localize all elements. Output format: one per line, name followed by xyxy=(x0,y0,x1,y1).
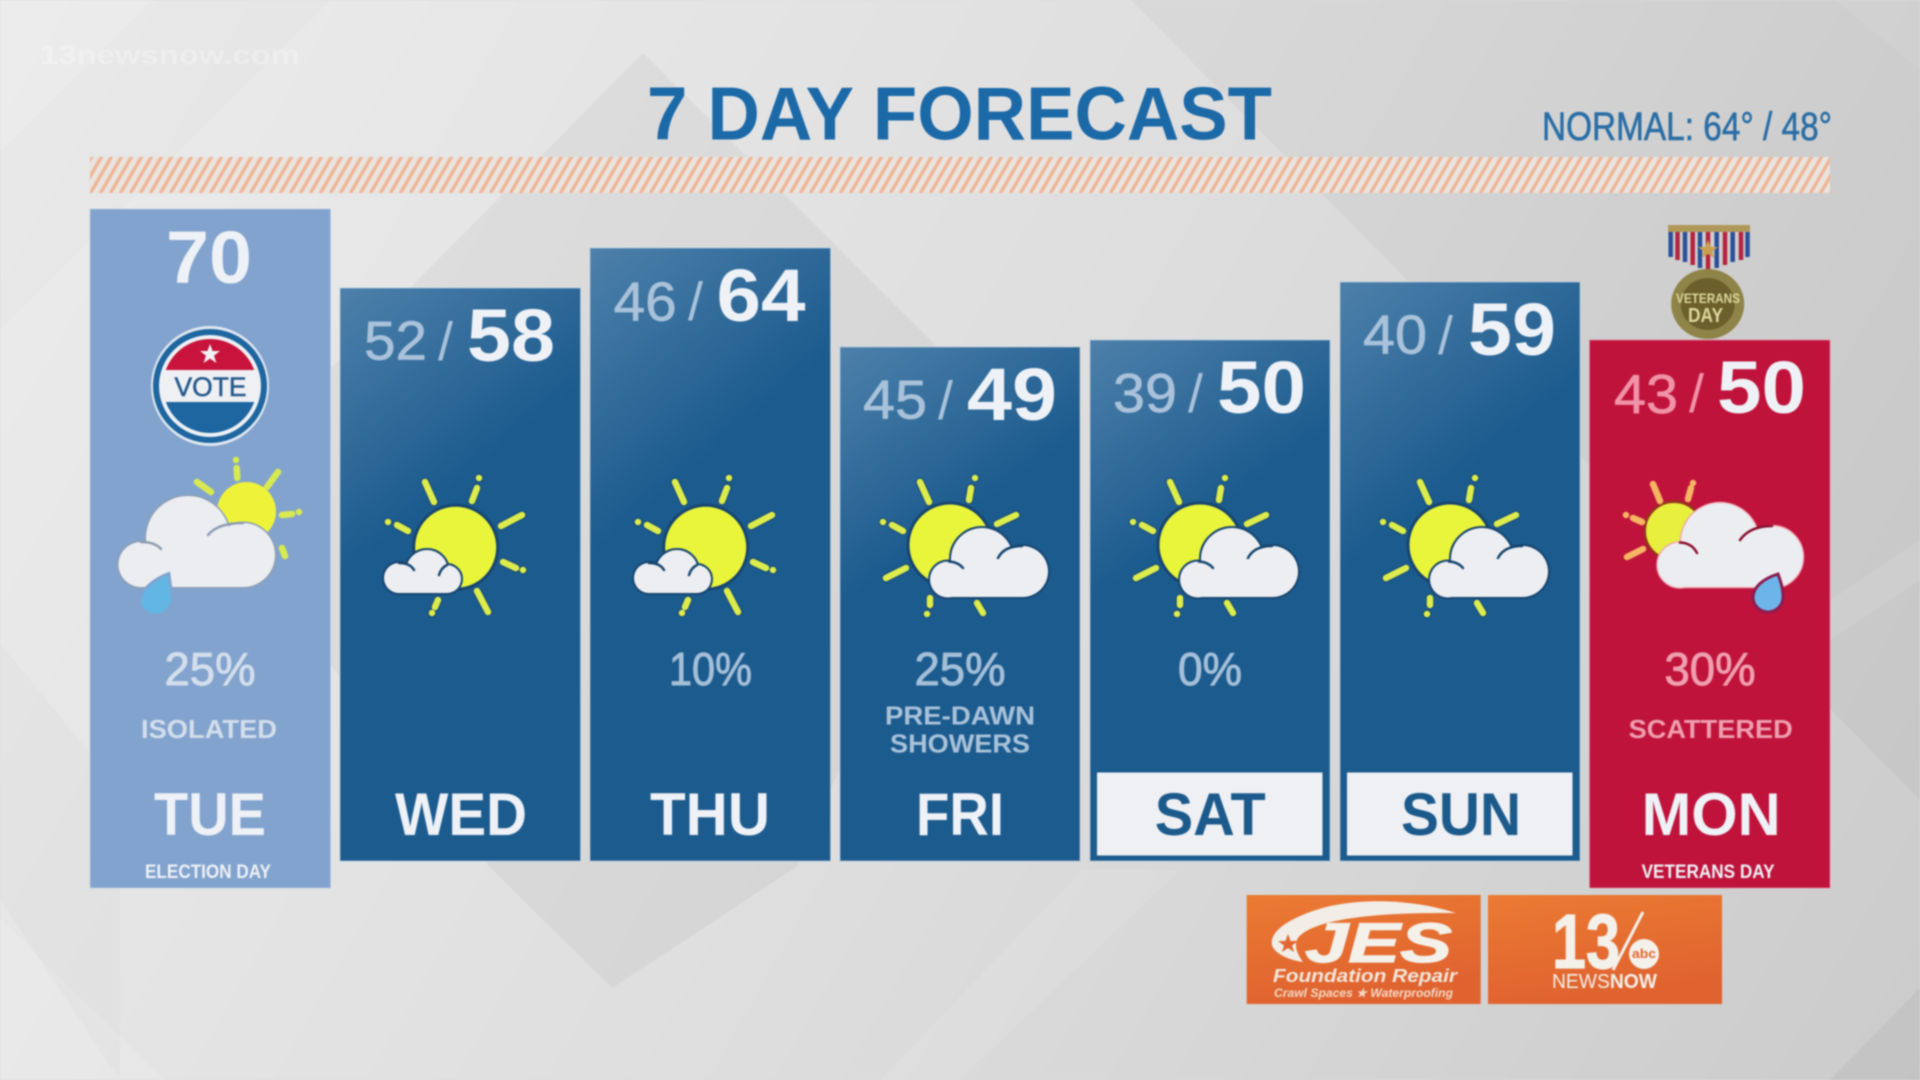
icon: cloud with sun and rain xyxy=(118,460,299,614)
mon background xyxy=(1590,340,1830,888)
logo number: 13 xyxy=(1552,899,1620,985)
panel: tuesday xyxy=(90,209,330,888)
mon temperatures: 50 xyxy=(1717,346,1806,429)
fri note: PRE-DAWN xyxy=(885,700,1035,730)
icon: veterans day medal xyxy=(1668,225,1750,339)
sat temperatures: / xyxy=(1188,364,1203,424)
fri temperatures: / xyxy=(938,371,953,431)
normal temperatures: NORMAL: 64° / 48° xyxy=(1542,105,1832,149)
wed day label: WED xyxy=(395,781,527,848)
tue note: ISOLATED xyxy=(141,714,277,744)
panel: wednesday xyxy=(340,288,580,861)
tue holiday label: ELECTION DAY xyxy=(145,862,271,883)
fri note: SHOWERS xyxy=(890,728,1030,758)
thu temperatures: 64 xyxy=(716,254,806,337)
icon: veterans day medal: DAY xyxy=(1688,305,1724,327)
thu temperatures: 46 xyxy=(614,270,677,332)
jes star xyxy=(1278,934,1298,952)
fri day label: FRI xyxy=(916,781,1004,848)
mon note: SCATTERED xyxy=(1629,714,1793,744)
striped orange band xyxy=(90,157,1830,193)
icon: sun with large cloud xyxy=(1133,478,1298,614)
logo slash xyxy=(1613,912,1643,970)
panel: friday xyxy=(840,347,1080,861)
sun temperatures xyxy=(1363,288,1556,371)
fri background xyxy=(840,347,1080,861)
wed background xyxy=(340,288,580,861)
title: 7 DAY FORECAST xyxy=(647,72,1272,156)
icon: vote badge xyxy=(151,326,269,446)
thu temperatures xyxy=(614,254,806,337)
sat day label: SAT xyxy=(1155,781,1266,848)
icon: sun with small cloud xyxy=(384,478,523,613)
sat temperatures: 50 xyxy=(1217,346,1306,429)
thu temperatures: / xyxy=(688,272,703,332)
wed temperatures xyxy=(364,294,555,377)
thu day label: THU xyxy=(650,781,770,848)
wed temperatures: 52 xyxy=(364,310,427,372)
icon: veterans day medal: VETERANS xyxy=(1676,290,1740,306)
mon day label: MON xyxy=(1642,781,1781,848)
icon: sun with large cloud xyxy=(883,478,1048,614)
logo wordmark: NEWSNOW xyxy=(1552,971,1657,993)
sat temperatures xyxy=(1113,346,1306,429)
tue rain chance: 25% xyxy=(164,643,256,695)
fri rain chance: 25% xyxy=(914,643,1006,695)
wed temperatures: / xyxy=(438,312,453,372)
sat temperatures: 39 xyxy=(1113,362,1177,424)
sun temperatures: / xyxy=(1438,306,1453,366)
tue high temperature: 70 xyxy=(166,216,252,299)
fri temperatures: 45 xyxy=(863,368,927,430)
jes wordmark: JES xyxy=(1305,911,1452,974)
tue background xyxy=(90,209,330,888)
jes swoosh xyxy=(1272,901,1456,962)
abc circle: abc xyxy=(1632,946,1656,961)
panel: monday xyxy=(1590,340,1830,888)
fri temperatures xyxy=(863,353,1057,436)
sun day box xyxy=(1347,772,1572,856)
sponsor: jes foundation repair xyxy=(1247,895,1481,1004)
icon: cloud with sun and rain xyxy=(1626,483,1803,612)
jes tagline: Foundation Repair xyxy=(1273,966,1458,986)
mon temperatures: / xyxy=(1689,364,1704,424)
jes services: Crawl Spaces ★ Waterproofing xyxy=(1274,986,1454,1000)
sun temperatures: 40 xyxy=(1363,304,1427,366)
sat day box xyxy=(1097,772,1322,856)
watermark: 13newsnow.com xyxy=(40,40,300,70)
fri temperatures: 49 xyxy=(967,353,1057,436)
sat rain chance: 0% xyxy=(1178,643,1242,695)
mon temperatures xyxy=(1614,346,1806,429)
panel: saturday xyxy=(1090,340,1330,861)
tue day label: TUE xyxy=(154,781,266,848)
mon rain chance: 30% xyxy=(1664,643,1756,695)
icon: sun with small cloud xyxy=(634,478,773,613)
sun temperatures: 59 xyxy=(1468,288,1556,371)
icon: sun with large cloud xyxy=(1383,478,1548,614)
panel: sunday xyxy=(1340,282,1580,861)
mon holiday label: VETERANS DAY xyxy=(1642,862,1775,883)
sponsor: 13 news now logo xyxy=(1488,895,1722,1004)
thu background xyxy=(590,248,830,861)
mon temperatures: 43 xyxy=(1614,363,1678,425)
thu rain chance: 10% xyxy=(669,643,752,695)
wed temperatures: 58 xyxy=(467,294,555,377)
icon: vote badge: VOTE xyxy=(174,372,246,402)
panel: thursday xyxy=(590,248,830,861)
sun background xyxy=(1340,282,1580,861)
sun day label: SUN xyxy=(1401,781,1521,848)
fri note xyxy=(885,700,1035,758)
abc circle xyxy=(1629,939,1659,969)
sat background xyxy=(1090,340,1330,861)
